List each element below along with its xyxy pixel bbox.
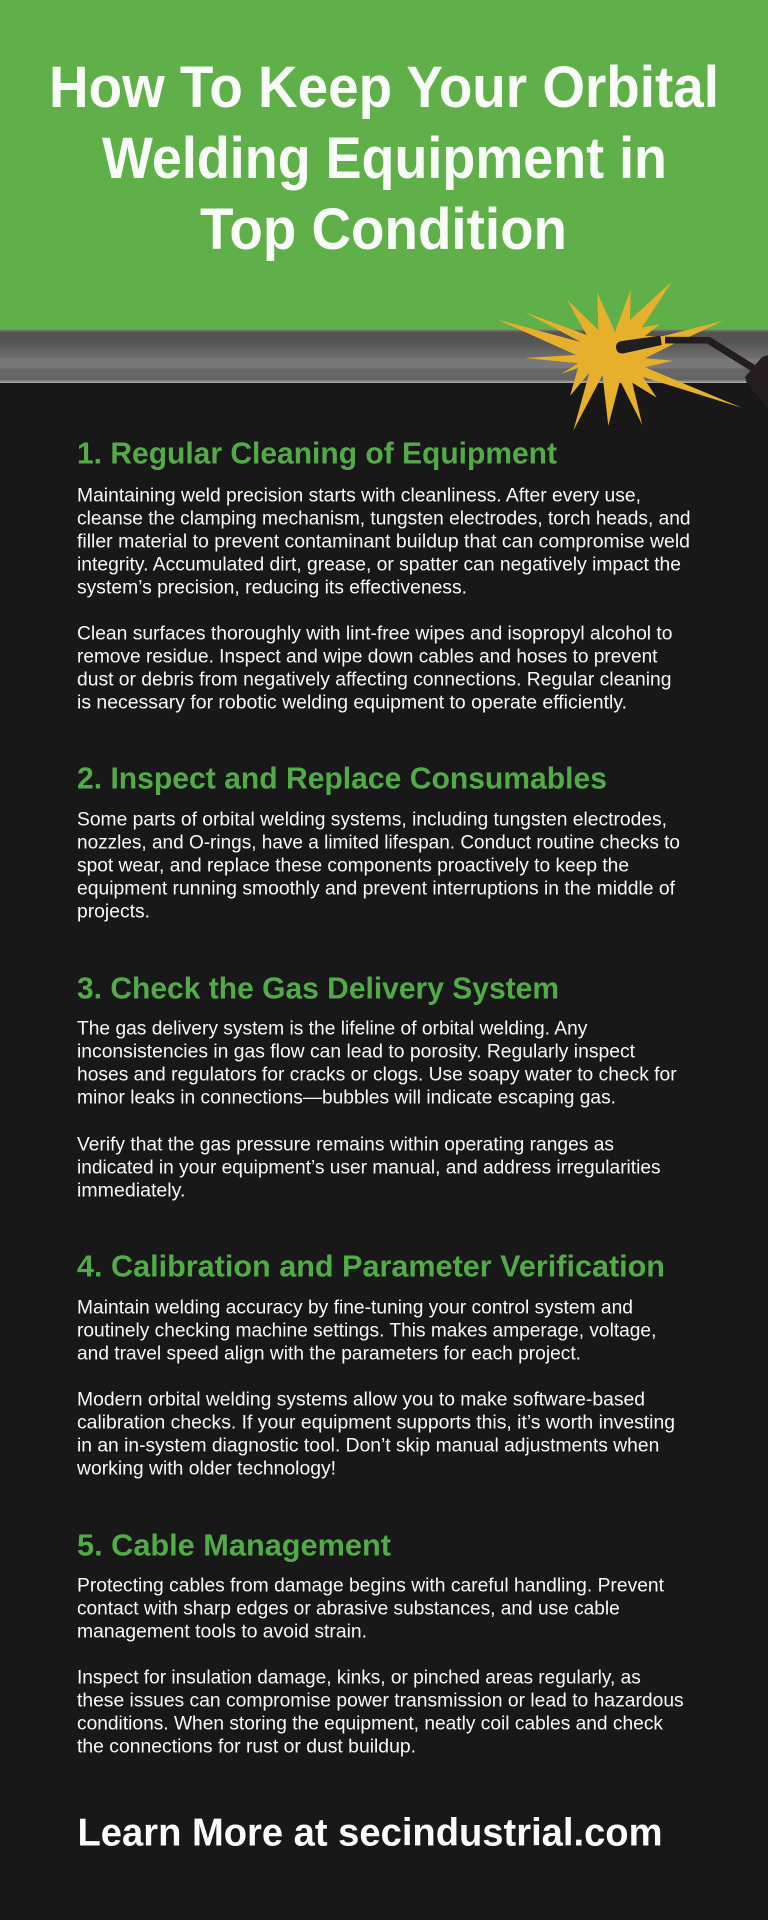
paragraph: integrity. Accumulated dirt, grease, or spatter can negatively impact the [77,554,681,575]
paragraph [77,809,680,922]
heading: gas delivery: 3. Check the Gas Delivery System [77,970,559,1005]
paragraph: cleanse the clamping mechanism, tungsten electrodes, torch heads, and [77,508,690,529]
paragraph: remove residue. Inspect and wipe down cables and hoses to prevent [77,646,658,667]
paragraph: The gas delivery system is the lifeline of orbital welding. Any [77,1018,588,1039]
paragraph [77,623,672,713]
paragraph: immediately. [77,1180,185,1201]
paragraph: minor leaks in connections—bubbles will indicate escaping gas. [77,1087,616,1108]
paragraph: Clean surfaces thoroughly with lint-free wipes and isopropyl alcohol to [77,623,672,644]
paragraph: system’s precision, reducing its effectiveness. [77,577,467,598]
section 5 [77,1527,684,1757]
paragraph: filler material to prevent contaminant buildup that can compromise weld [77,531,690,552]
torch tip [616,336,662,354]
title: Welding Equipment in [102,126,667,191]
torch neck [665,337,755,371]
paragraph: conditions. When storing the equipment, neatly coil cables and check [77,1713,663,1734]
paragraph: and travel speed align with the parameters for each project. [77,1343,581,1364]
paragraph [77,1297,656,1364]
heading: regular cleaning: 1. Regular Cleaning of Equipment [77,435,557,470]
section 2 [77,760,680,922]
green header background [0,0,768,330]
paragraph: these issues can compromise power transmission or lead to hazardous [77,1690,684,1711]
metal pipe band [0,329,768,383]
heading: cable management: 5. Cable Management [77,1527,391,1562]
paragraph: projects. [77,901,150,922]
paragraph: Inspect for insulation damage, kinks, or pinched areas regularly, as [77,1667,641,1688]
title: How To Keep Your Orbital [49,55,719,120]
heading: consumables: 2. Inspect and Replace Consumables [77,760,607,795]
paragraph: is necessary for robotic welding equipment to operate efficiently. [77,692,627,713]
section 3 [77,970,677,1201]
paragraph: hoses and regulators for cracks or clogs. Use soapy water to check for [77,1064,677,1085]
torch handle [745,355,768,408]
paragraph: contact with sharp edges or abrasive substances, and use cable [77,1598,620,1619]
paragraph: Maintaining weld precision starts with cleanliness. After every use, [77,485,641,506]
paragraph: Some parts of orbital welding systems, including tungsten electrodes, [77,809,667,830]
paragraph [77,1667,684,1757]
paragraph: Verify that the gas pressure remains within operating ranges as [77,1134,614,1155]
paragraph: in an in-system diagnostic tool. Don’t skip manual adjustments when [77,1435,659,1456]
section 1 [77,435,690,713]
paragraph: Protecting cables from damage begins with careful handling. Prevent [77,1575,665,1596]
spark burst [497,282,742,431]
paragraph: nozzles, and O-rings, have a limited lifespan. Conduct routine checks to [77,832,680,853]
paragraph [77,1575,665,1642]
paragraph: equipment running smoothly and prevent interruptions in the middle of [77,878,676,899]
paragraph [76,1389,675,1479]
paragraph: working with older technology! [76,1458,336,1479]
paragraph [77,485,690,598]
paragraph: calibration checks. If your equipment supports this, it’s worth investing [77,1412,675,1433]
footer call to action: Learn More at secindustrial.com [78,1811,662,1854]
paragraph: Maintain welding accuracy by fine-tuning your control system and [77,1297,633,1318]
paragraph: dust or debris from negatively affecting connections. Regular cleaning [77,669,672,690]
paragraph [77,1018,677,1108]
paragraph: inconsistencies in gas flow can lead to porosity. Regularly inspect [77,1041,636,1062]
paragraph: routinely checking machine settings. This makes amperage, voltage, [77,1320,656,1341]
paragraph: management tools to avoid strain. [77,1621,367,1642]
icon: welding torch and spark [497,282,768,431]
paragraph [77,1134,661,1201]
paragraph: the connections for rust or dust buildup. [77,1736,416,1757]
paragraph: spot wear, and replace these components proactively to keep the [77,855,629,876]
paragraph: Modern orbital welding systems allow you to make software-based [77,1389,645,1410]
heading: calibration: 4. Calibration and Parameter Verification [77,1248,665,1283]
header panel [0,0,768,330]
section 4 [76,1248,675,1479]
title [49,55,719,262]
paragraph: indicated in your equipment’s user manual, and address irregularities [77,1157,661,1178]
title: Top Condition [200,197,567,262]
